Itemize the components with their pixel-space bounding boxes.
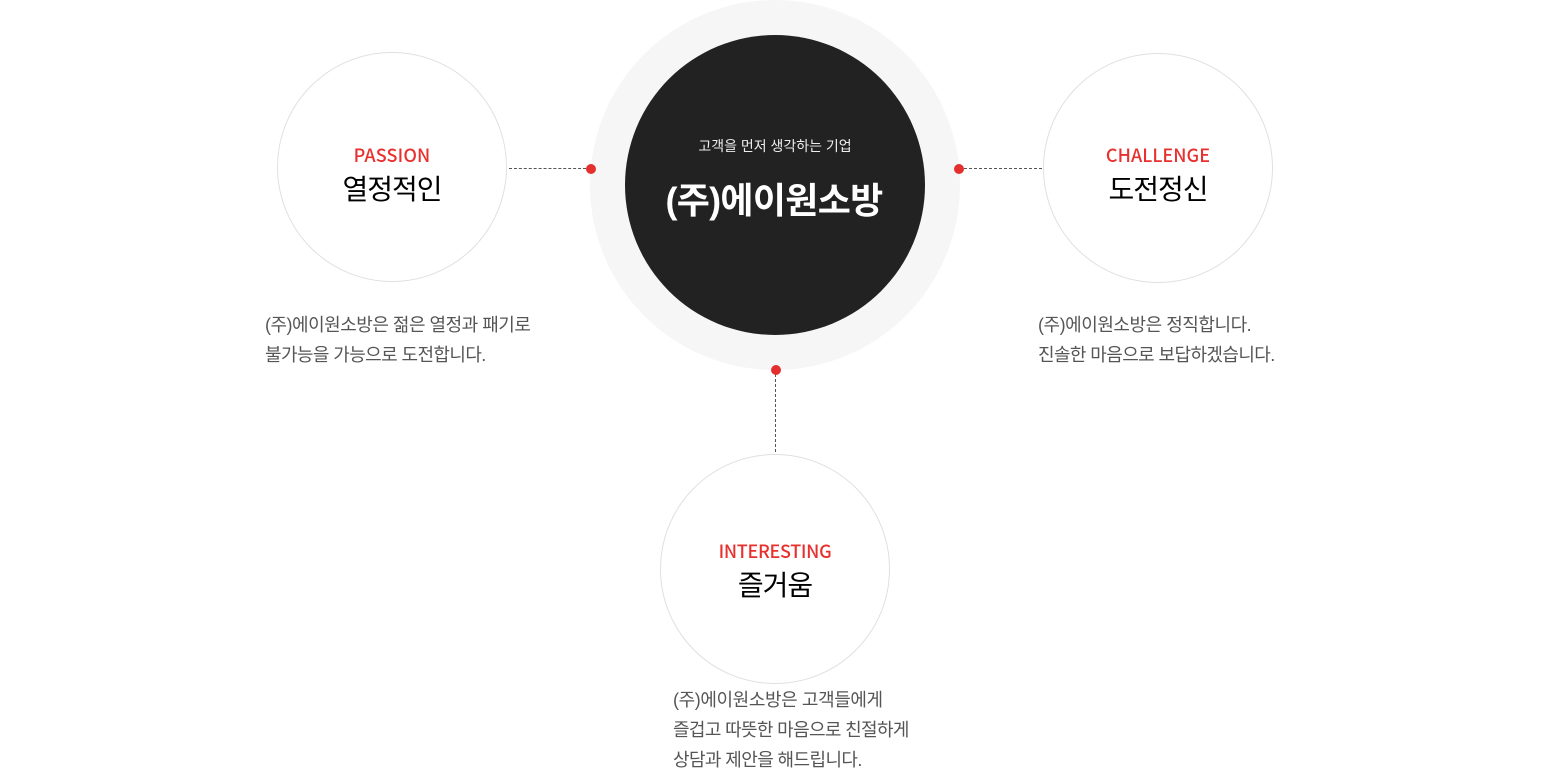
dark inner circle [625,35,925,335]
passion heading: 열정적인 [342,174,442,205]
passion description [265,315,530,365]
challenge heading: 도전정신 [1108,174,1208,205]
challenge label: CHALLENGE [1106,142,1210,168]
center subtitle: 고객을 먼저 생각하는 기업 [698,138,852,154]
passion label: PASSION [354,142,430,168]
panel: center circle [590,0,960,370]
connector: interesting [775,374,776,452]
connector: passion [509,168,586,169]
panel: passion circle [277,52,507,282]
connector: challenge [964,168,1042,169]
connector dot: interesting [771,365,781,375]
passion description: 불가능을 가능으로 도전합니다. [265,345,486,365]
panel: interesting circle [660,454,890,684]
challenge description [1038,315,1275,365]
interesting heading: 즐거움 [738,570,812,601]
panel: challenge circle [1043,53,1273,283]
connector dot: passion [586,164,596,174]
interesting description: 상담과 제안을 해드립니다. [673,750,862,770]
challenge description: (주)에이원소방은 정직합니다. [1038,315,1251,335]
connector dot: challenge [954,164,964,174]
interesting description: (주)에이원소방은 고객들에게 [673,690,883,710]
challenge description: 진솔한 마음으로 보답하겠습니다. [1038,345,1275,365]
interesting description [673,690,909,770]
interesting label: INTERESTING [719,538,831,564]
passion description: (주)에이원소방은 젊은 열정과 패기로 [265,315,530,335]
center title: (주)에이원소방 [665,180,883,221]
interesting description: 즐겁고 따뜻한 마음으로 친절하게 [673,720,909,740]
